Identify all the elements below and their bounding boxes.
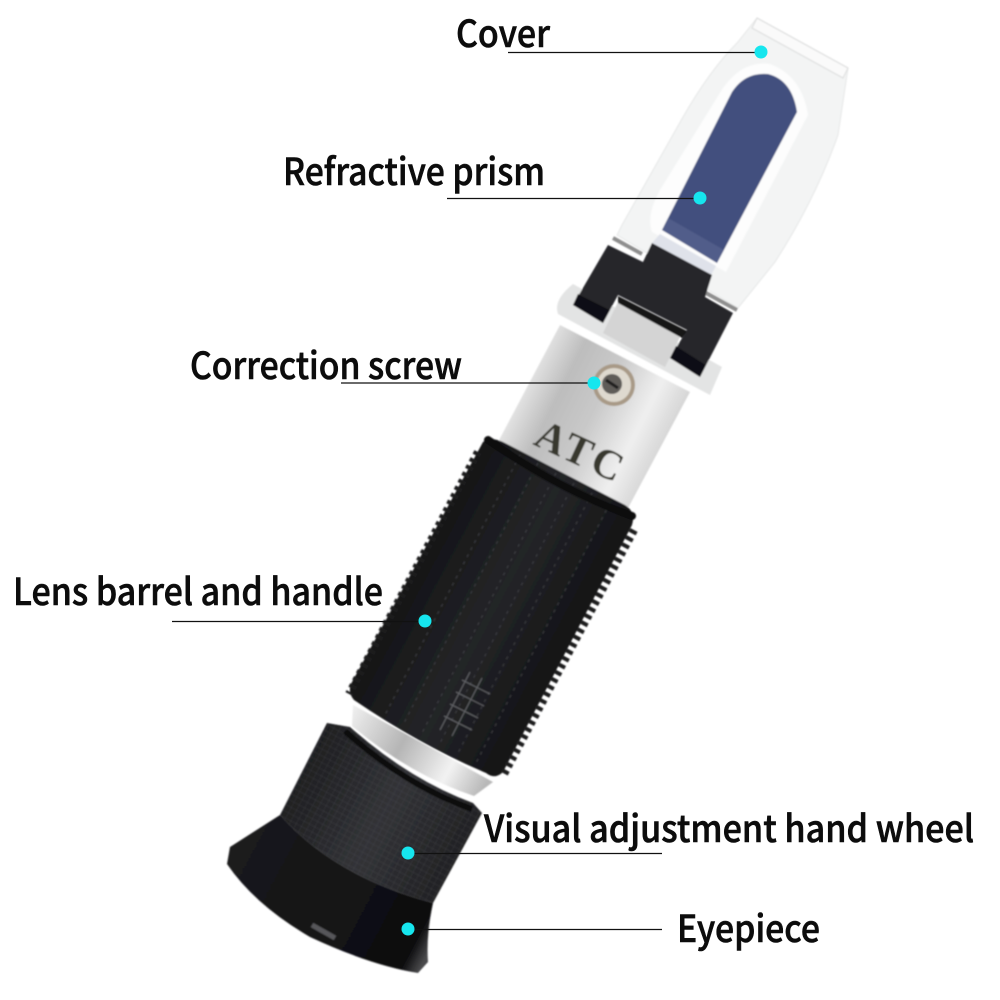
label: Correction screw: Correction screw [190,336,462,390]
collar: pale ring [557,284,722,395]
cover: transparent plastic lid [613,18,848,310]
black hinge block [573,243,733,377]
hinge clips [613,238,737,310]
label: Lens barrel and handle: Lens barrel and handle [13,562,383,616]
refractometer device [227,18,848,973]
label: Eyepiece [402,899,820,953]
label: Refractive prism: Refractive prism [283,142,545,196]
label: Cover: Cover [456,4,551,58]
label: Refractive prism [283,142,706,204]
silver ring [352,705,493,796]
silver barrel [498,325,690,510]
visual adjustment hand wheel [280,723,482,903]
black knurled handle [349,439,634,776]
eyepiece rubber cup [227,815,433,973]
label: Eyepiece: Eyepiece [677,899,820,953]
label: Cover [456,4,768,58]
silver tab [603,302,680,367]
correction screw [593,364,635,406]
refractive prism [662,74,797,263]
label: Visual adjustment hand wheel: Visual adjustment hand wheel [483,799,974,853]
ATC engraved label: ATC [528,411,631,492]
